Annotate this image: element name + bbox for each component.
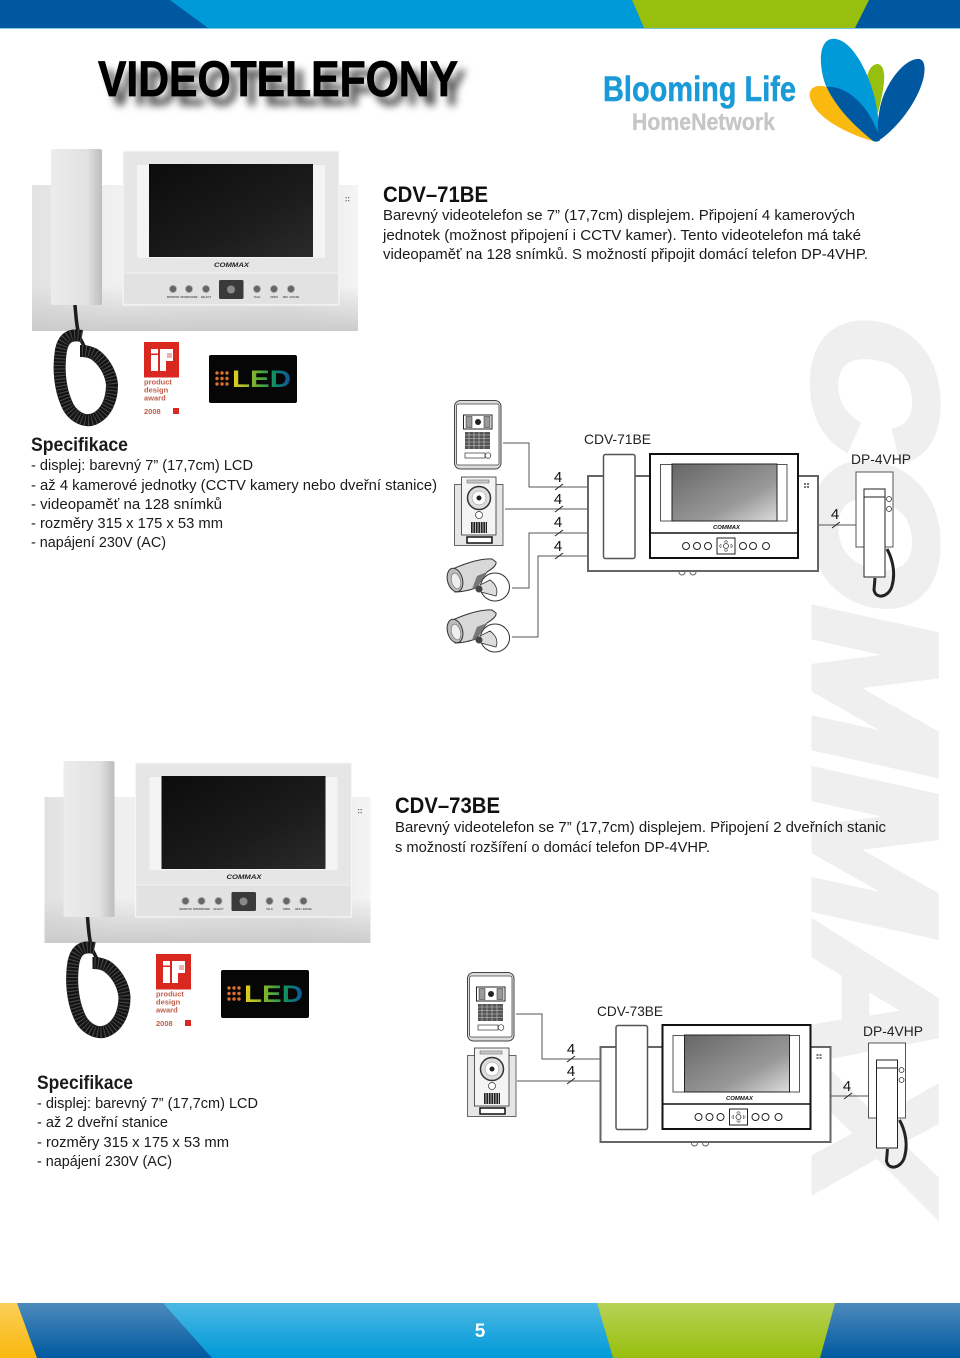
cable count labels <box>567 1041 851 1095</box>
cable count labels: 4 <box>567 1063 575 1080</box>
button labels: OPEN <box>283 907 290 911</box>
product photo: CDV-71BE <box>32 149 358 420</box>
door station one <box>454 400 501 469</box>
cable count labels: 4 <box>831 506 839 523</box>
logo wordmark: Blooming Life <box>603 70 796 109</box>
button labels: INTERPHONE <box>193 907 210 911</box>
handset unit DP-4VHP <box>856 472 894 596</box>
button labels: TALK <box>254 295 260 299</box>
monitor drawing <box>600 1025 830 1146</box>
cable count labels: 4 <box>554 538 562 555</box>
specification: CDV-71BE <box>31 435 437 551</box>
award caption: product <box>144 378 172 386</box>
button labels: REC / ERASE <box>295 907 312 911</box>
LED badge <box>209 355 297 403</box>
button labels <box>179 907 312 911</box>
title: VIDEOTELEFONY <box>98 51 458 107</box>
button labels <box>167 295 300 299</box>
button labels: INTERPHONE <box>180 295 198 299</box>
header colour band <box>0 0 960 29</box>
footer colour band <box>0 1303 960 1358</box>
wires <box>503 443 856 637</box>
brand label on monitor: COMMAX <box>226 874 262 881</box>
specification: CDV-71BE: - napájení 230V (AC) <box>31 534 166 551</box>
product heading: CDV-73BE: CDV–73BE <box>395 793 500 818</box>
button labels: MONITOR <box>167 295 179 299</box>
door station two <box>468 1048 516 1116</box>
LED wordmark: LED <box>244 981 303 1008</box>
label: DP-4VHP: DP-4VHP <box>851 451 911 467</box>
button labels: TALK <box>266 907 273 911</box>
button labels: OPEN <box>270 295 278 299</box>
cable count labels: 4 <box>843 1078 851 1095</box>
specification: CDV-71BE: - až 4 kamerové jednotky (CCTV kamery nebo dveřní stanice) <box>31 477 437 494</box>
iF product design award badge <box>156 954 191 1028</box>
description: CDV-73BE: s možností rozšíření o domácí telefon DP-4VHP. <box>395 839 710 856</box>
logo flower <box>810 39 925 142</box>
button labels: SELECT <box>201 295 212 299</box>
button labels: MONITOR <box>179 907 192 911</box>
award caption: award <box>156 1006 178 1014</box>
specification: CDV-73BE <box>37 1073 258 1170</box>
specification heading: Specifikace <box>37 1073 133 1094</box>
specification: CDV-71BE: - videopaměť na 128 snímků <box>31 496 222 513</box>
specification heading: Specifikace <box>31 435 128 456</box>
description: CDV-73BE: Barevný videotelefon se 7” (17,7cm) displejem. Připojení 2 dveřních stanic <box>395 819 886 836</box>
cable count labels <box>554 469 839 555</box>
award caption: design <box>144 386 169 394</box>
product heading: CDV-71BE: CDV–71BE <box>383 182 488 207</box>
door station two <box>454 477 503 546</box>
LED badge <box>221 970 309 1018</box>
description: CDV-71BE: jednotek (možnost připojení i CCTV kamer). Tento videotelefon má také <box>382 227 861 244</box>
handset unit DP-4VHP <box>868 1043 906 1167</box>
specification: CDV-73BE: - rozměry 315 x 175 x 53 mm <box>37 1134 229 1151</box>
award caption: 2008 <box>144 407 161 416</box>
specification: CDV-73BE: - až 2 dveřní stanice <box>37 1114 168 1131</box>
LED wordmark: LED <box>232 366 291 393</box>
monitor brand: COMMAX <box>726 1096 753 1102</box>
wiring diagram: CDV-71BE <box>445 400 911 652</box>
cable count labels: 4 <box>554 491 562 508</box>
specification: CDV-71BE: - displej: barevný 7” (17,7cm) LCD <box>31 457 253 474</box>
specification: CDV-71BE: - rozměry 315 x 175 x 53 mm <box>31 515 223 532</box>
award caption: award <box>144 394 166 402</box>
wiring diagram: CDV-73BE <box>468 972 923 1167</box>
button labels: REC / ERASE <box>283 295 300 299</box>
award caption: product <box>156 990 184 998</box>
cable count labels: 4 <box>554 469 562 486</box>
page number: 5 <box>475 1321 486 1342</box>
monitor brand: COMMAX <box>713 525 740 531</box>
award caption: 2008 <box>156 1019 173 1028</box>
specification: CDV-73BE: - displej: barevný 7” (17,7cm) LCD <box>37 1095 258 1112</box>
CCTV camera one <box>445 559 510 601</box>
iF product design award badge <box>144 342 179 416</box>
description: CDV-71BE <box>382 207 868 263</box>
award caption: design <box>156 998 181 1006</box>
monitor drawing <box>588 454 818 575</box>
product photo: CDV-73BE <box>44 761 370 1032</box>
cable count labels: 4 <box>567 1041 575 1058</box>
description: CDV-71BE: Barevný videotelefon se 7” (17,7cm) displejem. Připojení 4 kamerových <box>383 207 855 224</box>
label: CDV-71BE: CDV-71BE <box>584 431 651 447</box>
CCTV camera two <box>445 610 510 652</box>
brand label on monitor: COMMAX <box>214 262 250 269</box>
cable count labels: 4 <box>554 514 562 531</box>
logo subtitle: HomeNetwork <box>632 109 776 136</box>
button labels: SELECT <box>213 907 224 911</box>
wires <box>516 1014 868 1099</box>
door station one <box>468 972 514 1041</box>
logo: Blooming Life HomeNetwork <box>603 39 925 142</box>
description: CDV-73BE <box>395 819 886 856</box>
label: CDV-73BE: CDV-73BE <box>597 1003 663 1019</box>
description: CDV-71BE: videopaměť na 128 snímků. S možností připojit domácí telefon DP-4VHP. <box>383 246 868 263</box>
label: DP-4VHP: DP-4VHP <box>863 1023 923 1039</box>
specification: CDV-73BE: - napájení 230V (AC) <box>37 1153 172 1170</box>
